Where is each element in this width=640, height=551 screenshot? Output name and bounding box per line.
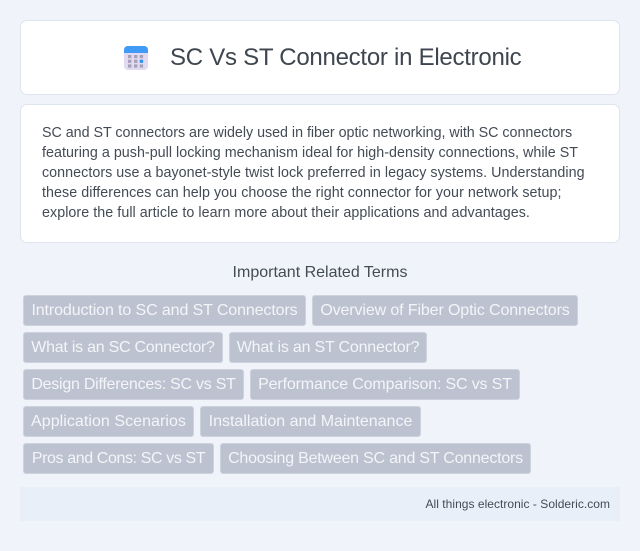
related term tags: Design Differences: SC vs ST	[31, 376, 236, 393]
related term tags: Choosing Between SC and ST Connectors	[228, 450, 523, 467]
related term tags: Performance Comparison: SC vs ST	[258, 376, 512, 393]
related term tags	[23, 295, 578, 474]
related term tags: Pros and Cons: SC vs ST	[32, 450, 205, 467]
intro text: connectors use a bayonet-style twist lock preferred in legacy systems. Understanding	[42, 165, 585, 181]
footer text: All things electronic - Solderic.com	[426, 497, 610, 511]
related term tags: Installation and Maintenance	[209, 413, 412, 430]
related term tags: Overview of Fiber Optic Connectors	[320, 302, 570, 319]
related terms heading: Important Related Terms	[233, 264, 407, 281]
intro text: featuring a push-pull locking mechanism ideal for high-density connections, while ST	[42, 145, 578, 161]
intro text	[42, 125, 585, 221]
related term tags: Introduction to SC and ST Connectors	[31, 302, 298, 319]
title: SC Vs ST Connector in Electronic	[170, 44, 521, 71]
intro text: SC and ST connectors are widely used in fiber optic networking, with SC connectors	[42, 125, 572, 141]
icon: calendar	[124, 46, 148, 70]
related term tags: What is an ST Connector?	[237, 339, 419, 356]
related term tags: What is an SC Connector?	[31, 339, 215, 356]
related term tags: Application Scenarios	[31, 413, 186, 430]
intro panel	[20, 104, 620, 243]
footer bar	[20, 487, 620, 521]
intro text: explore the full article to learn more about their applications and advantages.	[42, 205, 530, 221]
header panel	[20, 20, 620, 95]
intro text: these differences can help you choose the right connector for your network setup;	[42, 185, 562, 201]
